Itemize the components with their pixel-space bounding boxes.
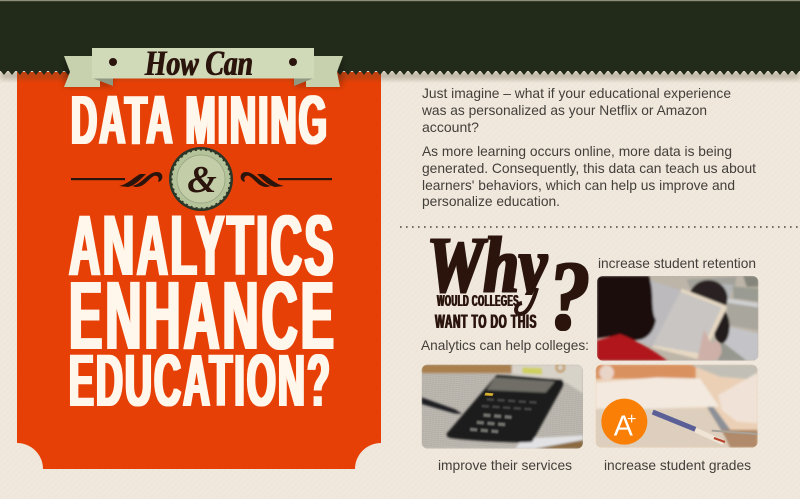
intro paragraph one: was as personalized as your Netflix or Amazon xyxy=(421,102,707,118)
dark header band xyxy=(0,0,800,76)
label: increase student retention: increase student retention xyxy=(598,255,756,271)
intro paragraph two: learners' behaviors, which can help us improve and xyxy=(422,177,735,193)
header band shadow xyxy=(0,72,800,79)
heading: question mark: ? xyxy=(549,240,590,351)
ampersand badge xyxy=(169,147,233,211)
photo: calculator on notebook xyxy=(422,364,583,449)
ribbon: How Can: How Can xyxy=(144,43,253,83)
intro paragraph two xyxy=(422,143,756,209)
heading: why: Why xyxy=(427,222,547,310)
panel: orange title banner xyxy=(17,72,381,469)
photo: graded paper with pen xyxy=(596,365,758,448)
A+ grade badge xyxy=(601,399,647,445)
subheading: want to do this: WANT TO DO THIS xyxy=(435,312,537,333)
text: WOULD COLLEGES xyxy=(437,293,519,310)
intro paragraph two: personalize education. xyxy=(422,193,560,209)
heading: why xyxy=(430,236,549,316)
title: education: EDUCATION? xyxy=(69,339,332,422)
title: data mining: DATA MINING xyxy=(71,81,329,159)
A+ grade badge: + xyxy=(627,411,636,428)
intro paragraph one: account? xyxy=(422,119,479,135)
flourish: right xyxy=(241,172,332,187)
intro paragraph two: generated. Consequently, this data can teach us about xyxy=(422,160,756,176)
ribbon: How Can xyxy=(64,43,343,87)
A+ grade badge: A xyxy=(614,410,634,442)
ampersand badge: & xyxy=(187,159,217,201)
text: analytics can help: Analytics can help colleges: xyxy=(421,337,589,353)
label: increase student grades: increase student grades xyxy=(604,457,751,473)
photo: student reading book xyxy=(597,276,758,361)
title: analytics: ANALYTICS xyxy=(69,198,336,294)
flourish: left xyxy=(71,172,162,187)
calculator keys xyxy=(470,399,538,432)
title: enhance: ENHANCE xyxy=(69,261,337,370)
intro paragraph one: Just imagine – what if your educational experience xyxy=(422,85,731,101)
label: improve their services: improve their services xyxy=(438,457,572,473)
intro paragraph two: As more learning occurs online, more data is being xyxy=(422,143,732,159)
intro paragraph one xyxy=(421,85,731,135)
